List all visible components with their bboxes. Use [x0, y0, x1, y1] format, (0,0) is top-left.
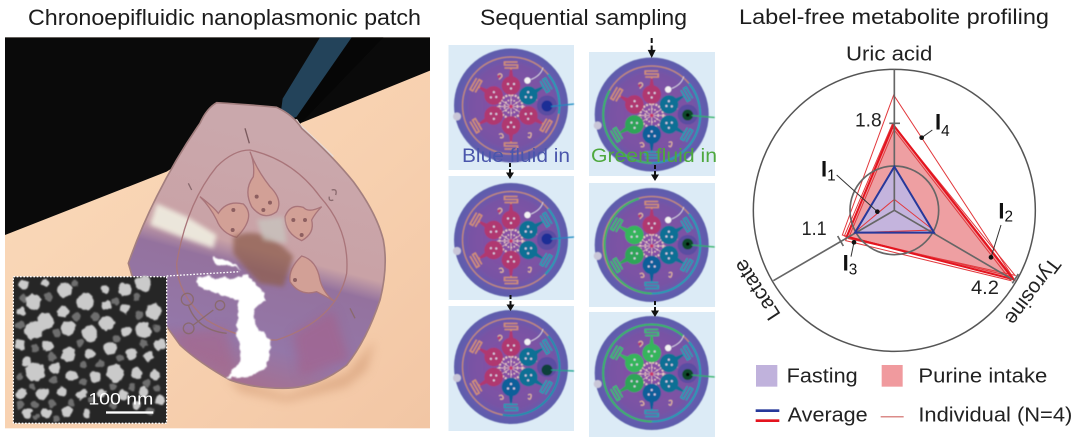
value 4.2: 4.2 [971, 278, 999, 299]
swatch: fasting [756, 365, 777, 387]
scale bar: 100 nm [88, 389, 153, 408]
arrow: blue 2 [506, 295, 514, 311]
scale bar [88, 389, 153, 414]
arrow: blue 1 [506, 163, 514, 179]
title: profiling: Label-free metabolite profiling [739, 6, 1049, 29]
dial: green step 3 [589, 312, 715, 437]
legend text: individual: Individual (N=4) [918, 404, 1072, 427]
value 1.1: 1.1 [802, 219, 827, 240]
callouts [837, 130, 1001, 260]
label: green fluid: Green fluid in [591, 146, 717, 167]
value 1.8: 1.8 [855, 111, 882, 132]
axes and inner circle [773, 69, 1018, 283]
photo panel: patch on skin [5, 37, 430, 428]
purine average [847, 125, 1013, 279]
label I3: I [843, 251, 849, 276]
radar chart [753, 69, 1035, 351]
specular glare [197, 256, 272, 378]
arrow: green top [648, 38, 656, 58]
axis label: uric acid: Uric acid [846, 43, 932, 66]
label I1: I [821, 157, 827, 182]
line key: average [756, 409, 779, 422]
legend text: fasting: Fasting [787, 365, 858, 388]
label: blue fluid: Blue fluid in [462, 146, 570, 167]
legend [756, 365, 1072, 427]
reservoirs [200, 152, 335, 302]
swatch: purine intake [882, 365, 903, 387]
label I2: 2 [1004, 209, 1013, 226]
dial: blue step 2 [448, 176, 574, 300]
dial: blue step 3 [448, 306, 574, 431]
SEM inset [13, 275, 167, 423]
dial: green step 1 [589, 52, 715, 176]
title: patch: Chronoepifluidic nanoplasmonic patch [28, 5, 421, 30]
tweezers [281, 37, 383, 157]
arrow: green 1 [651, 165, 659, 181]
dial: green step 2 [589, 183, 715, 307]
label I2: I [998, 198, 1004, 223]
purine intake area [847, 125, 1013, 279]
label I4: 4 [941, 123, 950, 140]
dial: blue step 1 [448, 45, 574, 170]
label I1: 1 [827, 168, 836, 185]
axis label: lactate: Lactate [729, 255, 785, 324]
legend text: average: Average [788, 404, 868, 427]
individual traces [842, 95, 1015, 281]
radar chart panel [729, 43, 1072, 427]
fasting area [855, 167, 934, 233]
label I4: I [935, 109, 941, 134]
label I3: 3 [849, 262, 857, 279]
arrow: green 2 [651, 301, 659, 317]
legend text: purine intake: Purine intake [918, 365, 1047, 388]
fasting average [855, 167, 934, 233]
flexible patch [128, 103, 385, 388]
panel: sequential sampling [448, 38, 717, 437]
title: sampling: Sequential sampling [480, 5, 687, 30]
line key: individual [881, 416, 904, 417]
axis label: tyrosine: Tyrosine [1000, 253, 1065, 329]
dotted connector [167, 272, 240, 276]
